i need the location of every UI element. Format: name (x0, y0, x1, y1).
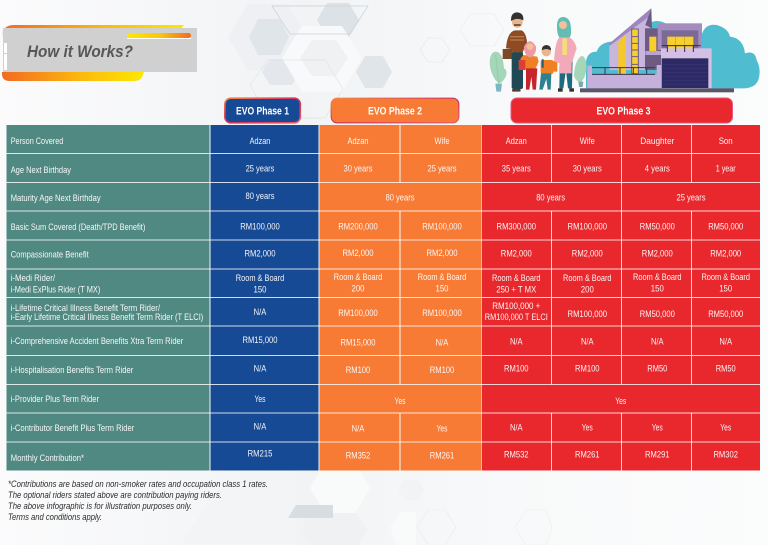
column: phase 2 values: RM100 (430, 364, 454, 375)
column: phase 2 values: Adzan (348, 135, 368, 146)
column: phase 3 values: N/A (719, 335, 733, 346)
column: phase 3 values: N/A (581, 335, 594, 346)
column: phase 3 values: RM100,000 (568, 220, 607, 232)
column: phase 1 values (210, 125, 318, 470)
column: phase 1 values: Adzan (250, 135, 270, 146)
column: phase 3 values: Wife (580, 135, 595, 146)
column: phase 3 values: RM302 (713, 448, 738, 459)
column: row labels: i-Medi Rider/ (11, 272, 55, 283)
column: row labels: i-Contributor Benefit Plus Term Rider (11, 422, 134, 433)
column: row labels (6, 125, 210, 470)
footnotes: Terms and conditions apply. (8, 512, 102, 523)
column: phase 3 values: Adzan (506, 135, 527, 146)
column: phase 3 values: Daughter (640, 135, 674, 146)
column: phase 3 values: 1 year (716, 163, 736, 174)
column: phase 1 values: RM100,000 (240, 220, 280, 232)
column: phase 3 values: Yes (582, 421, 593, 432)
column: phase 2 values: Yes (394, 395, 406, 406)
column: phase 3 values: Yes (720, 421, 731, 432)
column: row labels: Monthly Contribution* (11, 452, 84, 463)
column: phase 3 values: Yes (615, 395, 626, 406)
column: phase 2 values: Room & Board (334, 271, 382, 282)
column: phase 2 values: Yes (436, 422, 448, 433)
footnotes (8, 479, 268, 523)
illustration: family (490, 12, 586, 92)
comparison table (6, 125, 760, 470)
column: phase 3 values (482, 125, 760, 470)
column: phase 3 values: RM100,000 (568, 308, 607, 319)
column: phase 3 values: RM50,000 (640, 220, 675, 232)
column: phase 2 values (320, 125, 482, 470)
column: row labels: i-Early Lifetime Critical Illness Benefit Term Rider (T ELCI) (11, 311, 203, 322)
column: phase 3 values: RM50,000 (708, 308, 743, 319)
column: phase 3 values: Room & Board (492, 272, 541, 283)
column: row labels: i-Provider Plus Term Rider (11, 393, 99, 404)
column: phase 3 values: Room & Board (701, 271, 750, 282)
column: row labels: i-Lifetime Critical Illness Benefit Term Rider/ (11, 302, 160, 313)
column: phase 3 values: RM2,000 (642, 248, 673, 259)
column: phase 1 values: 150 (254, 284, 266, 294)
column: row labels: Basic Sum Covered (Death/TPD Benefit) (11, 221, 145, 232)
column: phase 3 values: N/A (651, 335, 664, 346)
column: phase 3 values: RM100,000 T ELCI (485, 311, 548, 322)
footnotes: The optional riders stated above are contribution paying riders. (8, 490, 222, 501)
column: phase 3 values: RM100,000 + (492, 300, 541, 311)
column: phase 3 values: 200 (581, 284, 594, 294)
column: phase 2 values: RM100,000 (338, 307, 378, 318)
column: phase 2 values: RM100 (346, 364, 370, 375)
column: phase 2 values: RM261 (430, 449, 454, 460)
column: phase 2 values: RM15,000 (340, 336, 376, 347)
column: row labels: i-Comprehensive Accident Benefits Xtra Term Rider (11, 335, 183, 346)
mother (554, 17, 577, 92)
column: phase 3 values: 150 (719, 282, 732, 294)
column: row labels: i-Hospitalisation Benefits Term Rider (11, 364, 133, 375)
column: phase 3 values: RM50 (716, 363, 736, 374)
title banner (2, 25, 197, 81)
column: phase 2 values: 80 years (386, 191, 415, 202)
column: phase 3 values: Yes (652, 421, 663, 432)
icon: left plant (490, 52, 507, 92)
column: phase 2 values: Wife (434, 135, 450, 146)
column: phase 3 values: Room & Board (633, 271, 682, 282)
column: phase 2 values: 30 years (344, 163, 373, 174)
tab: EVO Phase 2 (331, 98, 459, 123)
column: phase 1 values: RM15,000 (242, 334, 278, 345)
column: phase 1 values: N/A (254, 420, 267, 432)
column: phase 3 values: RM2,000 (572, 248, 603, 259)
icon: right plant (574, 56, 586, 87)
column: phase 1 values: RM215 (248, 448, 272, 458)
tab: EVO Phase 3: EVO Phase 3 (596, 106, 650, 118)
column: phase 3 values: RM100 (575, 363, 600, 374)
column: phase 2 values: RM2,000 (426, 247, 458, 258)
column: phase 3 values: N/A (510, 421, 523, 432)
column: phase 1 values: Yes (254, 393, 266, 404)
column: phase 3 values: RM50,000 (708, 220, 743, 232)
column: phase 2 values: RM100,000 (422, 307, 462, 318)
column: phase 1 values: 80 years (246, 190, 275, 201)
column: phase 3 values: 250 + T MX (496, 284, 537, 294)
column: phase 1 values: N/A (254, 306, 267, 317)
column: phase 3 values: RM291 (645, 448, 670, 459)
column: phase 3 values: RM100 (504, 363, 529, 374)
column: phase 3 values: RM50,000 (640, 308, 675, 319)
column: phase 3 values: 80 years (536, 191, 565, 202)
column: row labels: Age Next Birthday (11, 164, 71, 175)
father (503, 12, 527, 92)
tab: EVO Phase 2: EVO Phase 2 (368, 106, 422, 118)
column: phase 2 values: N/A (436, 336, 449, 347)
column: phase 2 values: Room & Board (418, 271, 466, 282)
daughter (519, 41, 539, 90)
column: phase 2 values: RM100,000 (422, 220, 462, 232)
footnotes: *Contributions are based on non-smoker rates and occupation class 1 rates. (8, 479, 268, 490)
column: phase 3 values: RM300,000 (497, 220, 536, 232)
column: phase 2 values: RM200,000 (338, 220, 378, 232)
column: phase 1 values: 25 years (246, 163, 275, 174)
column: phase 3 values: RM261 (575, 448, 600, 459)
column: phase 1 values: Room & Board (236, 272, 284, 283)
column: phase 1 values: N/A (254, 362, 267, 374)
son (539, 45, 557, 90)
column: phase 3 values: 25 years (676, 191, 706, 202)
column: phase 2 values: 150 (436, 282, 448, 294)
title text: How it Works? (27, 43, 133, 61)
column: phase 3 values: RM2,000 (501, 248, 532, 259)
footnotes: The above infographic is for illustration purposes only. (8, 501, 192, 512)
illustration: house (580, 8, 760, 92)
column: phase 3 values: Room & Board (563, 272, 612, 283)
tab: EVO Phase 3 (511, 98, 732, 123)
column: row labels: Compassionate Benefit (11, 248, 89, 260)
column: phase 3 values: 35 years (502, 163, 531, 174)
column: row labels: i-Medi ExPlus Rider (T MX) (11, 284, 100, 294)
column: phase 2 values: RM352 (346, 449, 370, 460)
column: phase 3 values: 4 years (645, 163, 670, 174)
column: phase 3 values: N/A (510, 335, 523, 346)
column: row labels: Person Covered (11, 135, 63, 146)
column: phase 3 values: Son (719, 135, 733, 146)
column: phase 2 values: 25 years (428, 163, 457, 174)
column: phase 3 values: RM2,000 (710, 248, 741, 259)
column: phase 2 values: N/A (352, 422, 365, 433)
column: phase 1 values: RM2,000 (244, 248, 276, 259)
tab: EVO Phase 1 (225, 98, 300, 123)
column: phase 2 values: RM2,000 (342, 247, 374, 258)
tab: EVO Phase 1: EVO Phase 1 (236, 106, 289, 118)
column: row labels: Maturity Age Next Birthday (11, 192, 101, 203)
column: phase 3 values: RM532 (504, 448, 529, 459)
column: phase 3 values: RM50 (647, 363, 667, 374)
column: phase 3 values: 30 years (573, 163, 602, 174)
column: phase 3 values: 150 (651, 282, 664, 294)
column: phase 2 values: 200 (352, 282, 364, 294)
